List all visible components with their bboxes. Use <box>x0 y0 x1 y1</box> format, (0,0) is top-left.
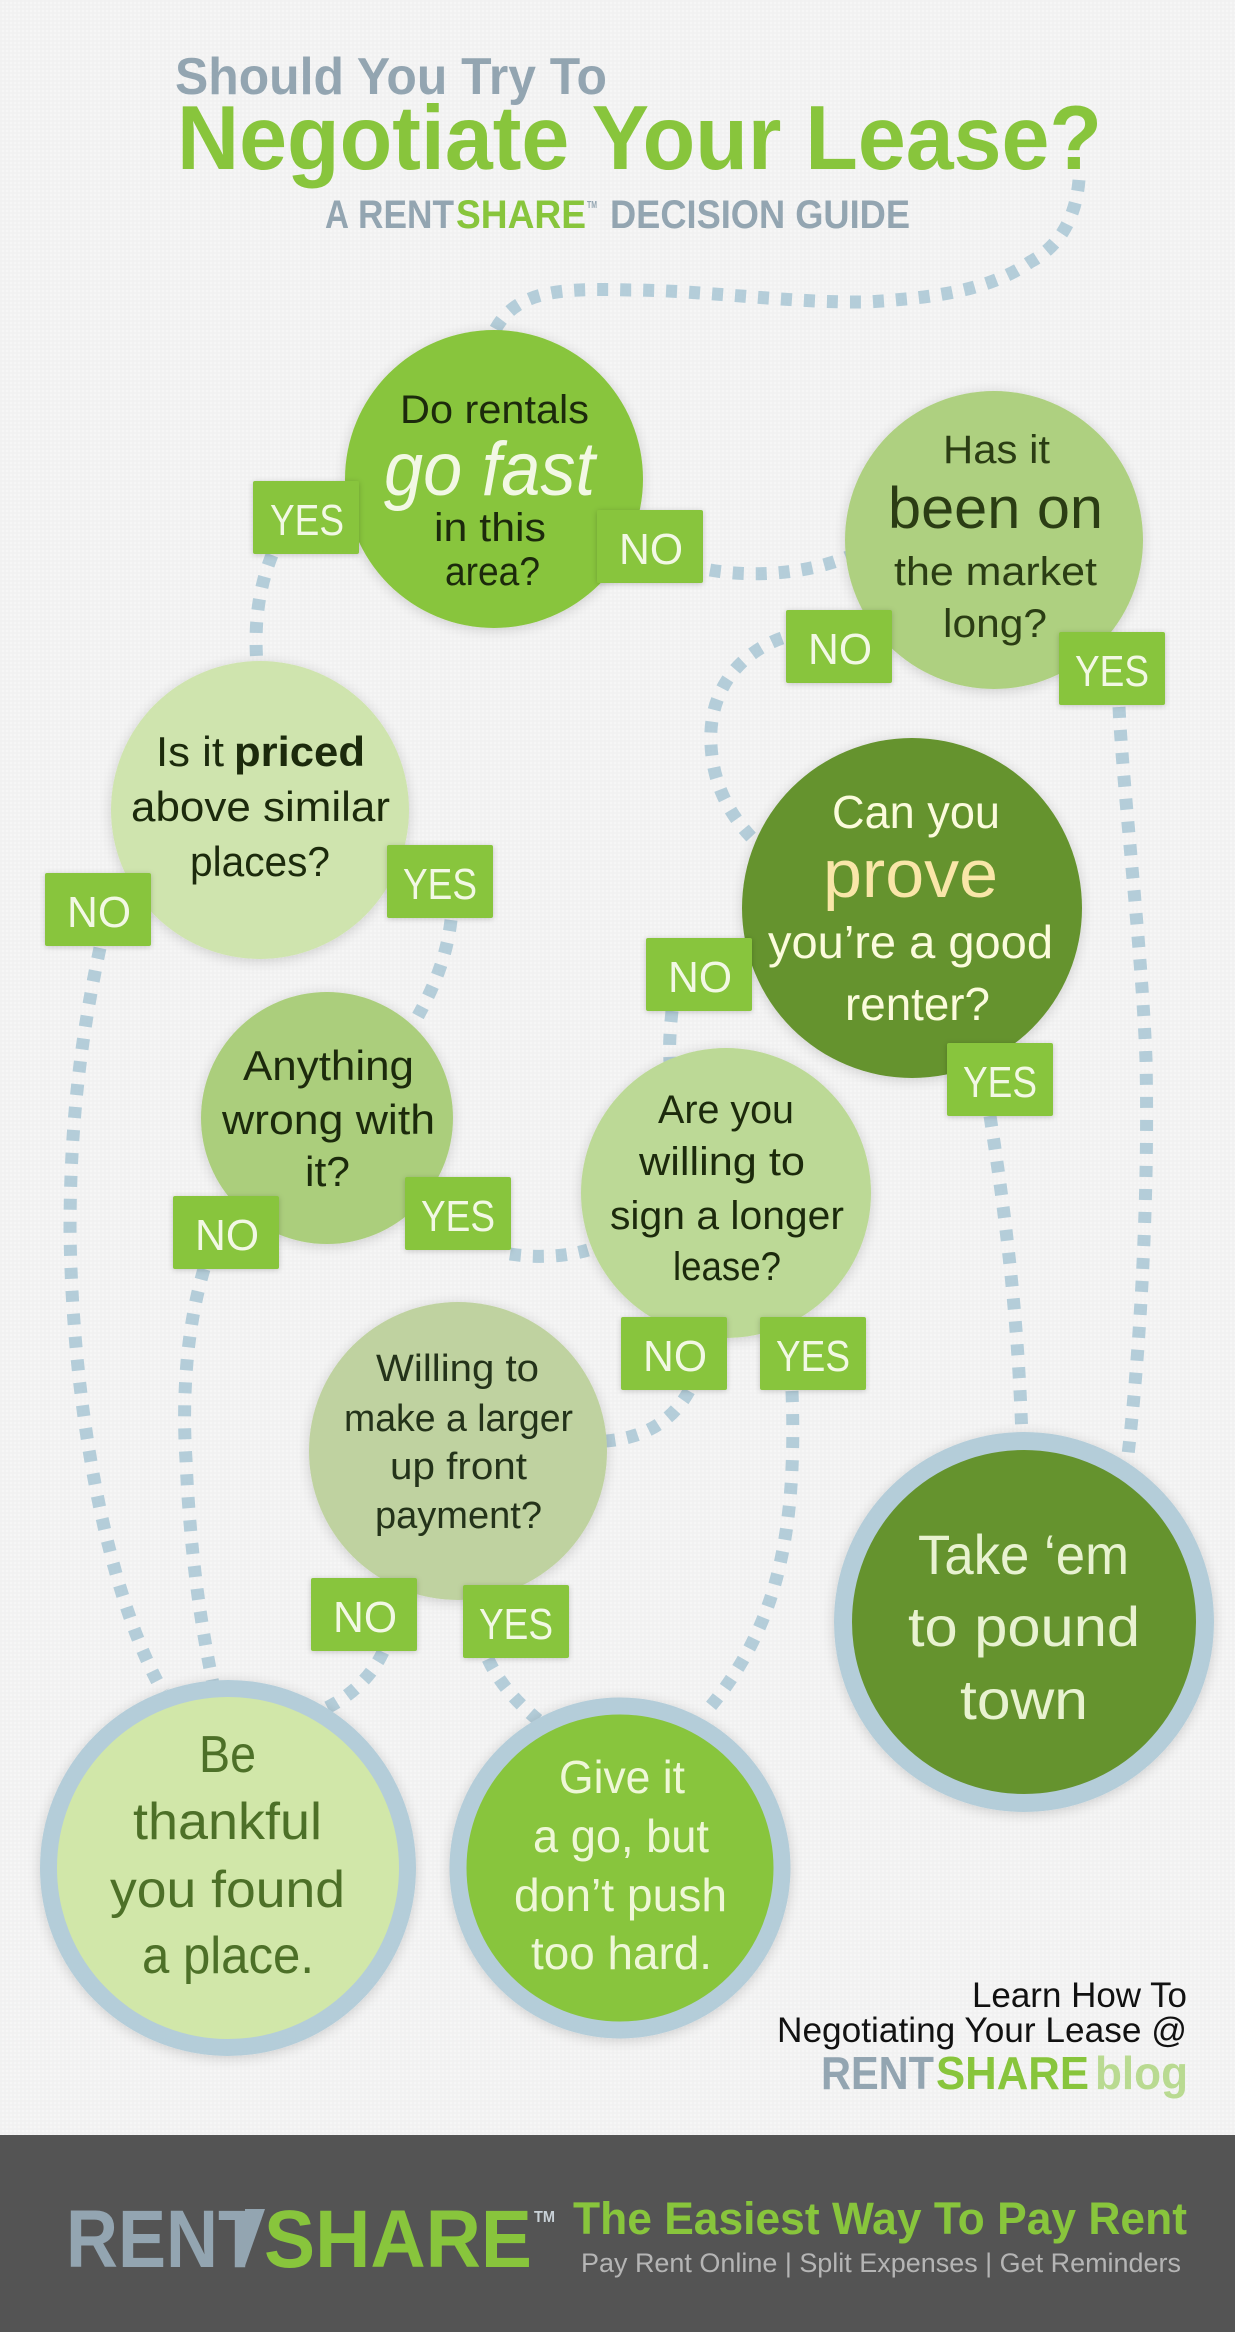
label: prove no: NO <box>668 953 732 1002</box>
label: larger yes <box>463 1585 569 1658</box>
question: been on the market long: been on <box>888 476 1103 541</box>
label: willing no: NO <box>643 1332 707 1381</box>
question: larger up front payment: make a larger <box>344 1398 573 1440</box>
question: can you prove you're a good renter: Can you <box>832 786 1000 838</box>
footer band <box>0 2135 1235 2332</box>
question: anything wrong with it <box>201 992 453 1244</box>
question: larger up front payment <box>309 1302 607 1600</box>
arrow: rentals yes to priced <box>256 555 272 665</box>
label: priced no <box>45 873 151 946</box>
outcome: take em to pound town <box>843 1441 1205 1803</box>
flow connectors <box>70 180 1147 1720</box>
question: can you prove you're a good renter: prove <box>823 836 998 912</box>
question: can you prove you're a good renter: renter? <box>845 978 990 1030</box>
arrow: anything yes to willing <box>510 1250 588 1256</box>
question: anything wrong with it: wrong with <box>221 1096 435 1143</box>
question: is it priced above similar places <box>111 661 409 959</box>
label: rentals yes: YES <box>270 496 344 545</box>
blog logo: blog <box>1095 2047 1188 2099</box>
label: prove yes <box>947 1043 1053 1116</box>
subtitle: RENT <box>358 193 454 237</box>
title line 2: Negotiate Your Lease? <box>177 88 1102 189</box>
label: prove no <box>646 938 752 1011</box>
outcome: be thankful: you found <box>110 1861 345 1919</box>
question: is it priced above similar places: Is it <box>156 728 224 775</box>
question: willing to sign a longer lease <box>581 1048 871 1338</box>
arrow: prove no to willing <box>670 1011 672 1062</box>
question: willing to sign a longer lease: lease? <box>673 1245 781 1289</box>
label: anything no <box>173 1196 279 1269</box>
subtitle: DECISION GUIDE <box>610 193 910 237</box>
footer logo: SHARE <box>264 2194 532 2285</box>
question: is it priced above similar places: priced <box>234 728 365 775</box>
blog logo: SHARE <box>936 2047 1089 2099</box>
label: priced yes <box>387 845 493 918</box>
label: willing no <box>621 1317 727 1390</box>
label: anything no: NO <box>195 1211 259 1260</box>
outcome: be thankful: Be <box>199 1726 256 1784</box>
title line 1: Should You Try To <box>175 48 607 106</box>
outcome: give it a go: too hard. <box>531 1927 712 1979</box>
label: prove yes: YES <box>963 1058 1037 1107</box>
arrow: willing yes to give <box>704 1391 793 1714</box>
question: do rentals go fast <box>345 330 643 628</box>
arrow: market no to prove <box>711 638 782 838</box>
question: larger up front payment: Willing to <box>376 1348 539 1390</box>
subtitle: SHARE <box>456 193 586 237</box>
label: larger no <box>311 1578 417 1651</box>
question: been on the market long: Has it <box>943 428 1050 472</box>
subtitle: TM <box>587 200 597 211</box>
question: can you prove you're a good renter: you’re a good <box>768 916 1053 968</box>
question: do rentals go fast: Do rentals <box>400 388 589 432</box>
footer tagline: The Easiest Way To Pay Rent <box>573 2193 1187 2244</box>
question: do rentals go fast: go fast <box>384 427 598 512</box>
question: been on the market long: long? <box>943 602 1047 646</box>
arrow: larger no to thankful <box>322 1652 383 1710</box>
label: rentals no: NO <box>619 525 683 574</box>
label: market no <box>786 610 892 683</box>
footer logo <box>66 2194 555 2285</box>
title <box>175 48 1102 237</box>
outcome: be thankful: thankful <box>133 1793 322 1851</box>
outcome: take em to pound town: to pound <box>908 1595 1140 1658</box>
question: willing to sign a longer lease: sign a longer <box>610 1194 844 1238</box>
outcome: be thankful: a place. <box>142 1927 314 1985</box>
question: can you prove you're a good renter <box>742 738 1082 1078</box>
question: do rentals go fast: area? <box>445 550 540 594</box>
label: anything yes: YES <box>421 1192 495 1241</box>
outcome: give it a go: a go, but <box>533 1810 709 1862</box>
question: do rentals go fast: in this <box>434 506 546 550</box>
arrow: priced no to thankful <box>70 948 163 1692</box>
label: rentals yes <box>253 481 359 554</box>
question: larger up front payment: up front <box>390 1446 527 1488</box>
subtitle: A <box>325 193 349 237</box>
question: willing to sign a longer lease: willing to <box>638 1140 805 1184</box>
label: priced no: NO <box>67 888 131 937</box>
question: been on the market long <box>845 391 1143 689</box>
label: rentals no <box>597 510 703 583</box>
label: market no: NO <box>808 625 872 674</box>
arrow: anything no to thankful <box>185 1269 213 1684</box>
arrow: rentals no to market <box>710 556 850 574</box>
outcome: give it a go <box>458 1706 782 2030</box>
arrow: willing no to larger <box>606 1391 689 1441</box>
blog callout: Negotiating Your Lease @ <box>777 2011 1187 2050</box>
question: anything wrong with it: it? <box>305 1148 350 1195</box>
footer logo: TM <box>534 2209 555 2226</box>
label: willing yes: YES <box>776 1332 850 1381</box>
outcome: be thankful <box>48 1688 408 2048</box>
question: willing to sign a longer lease: Are you <box>658 1088 794 1132</box>
arrow: priced yes to anything <box>418 920 451 1016</box>
subtitle <box>325 193 910 237</box>
label: anything yes <box>405 1177 511 1250</box>
footer logo: RENT <box>66 2194 262 2285</box>
arrow: market yes to take em <box>1119 707 1147 1455</box>
question: is it priced above similar places: places? <box>190 838 330 885</box>
blog logo <box>821 2047 1188 2099</box>
arrow: larger yes to give <box>488 1659 538 1720</box>
blog callout: Learn How To <box>972 1976 1187 2015</box>
label: priced yes: YES <box>403 860 477 909</box>
blog callout <box>777 1976 1188 2099</box>
arrow: title to first question <box>494 180 1079 332</box>
blog logo: RENT <box>821 2047 934 2099</box>
label: larger no: NO <box>333 1593 397 1642</box>
label: market yes: YES <box>1075 647 1149 696</box>
label: willing yes <box>760 1317 866 1390</box>
label: larger yes: YES <box>479 1600 553 1649</box>
label: market yes <box>1059 632 1165 705</box>
arrow: prove yes to take em <box>990 1116 1022 1440</box>
outcome: give it a go: Give it <box>559 1751 685 1803</box>
outcome: take em to pound town: Take ‘em <box>918 1523 1129 1586</box>
question: is it priced above similar places: above similar <box>131 783 390 830</box>
question: been on the market long: the market <box>894 550 1097 594</box>
question: larger up front payment: payment? <box>375 1495 542 1537</box>
outcome: take em to pound town: town <box>960 1668 1088 1731</box>
question: anything wrong with it: Anything <box>243 1042 414 1089</box>
outcome: give it a go: don’t push <box>514 1869 727 1921</box>
footer features: Pay Rent Online | Split Expenses | Get Reminders <box>581 2248 1181 2278</box>
